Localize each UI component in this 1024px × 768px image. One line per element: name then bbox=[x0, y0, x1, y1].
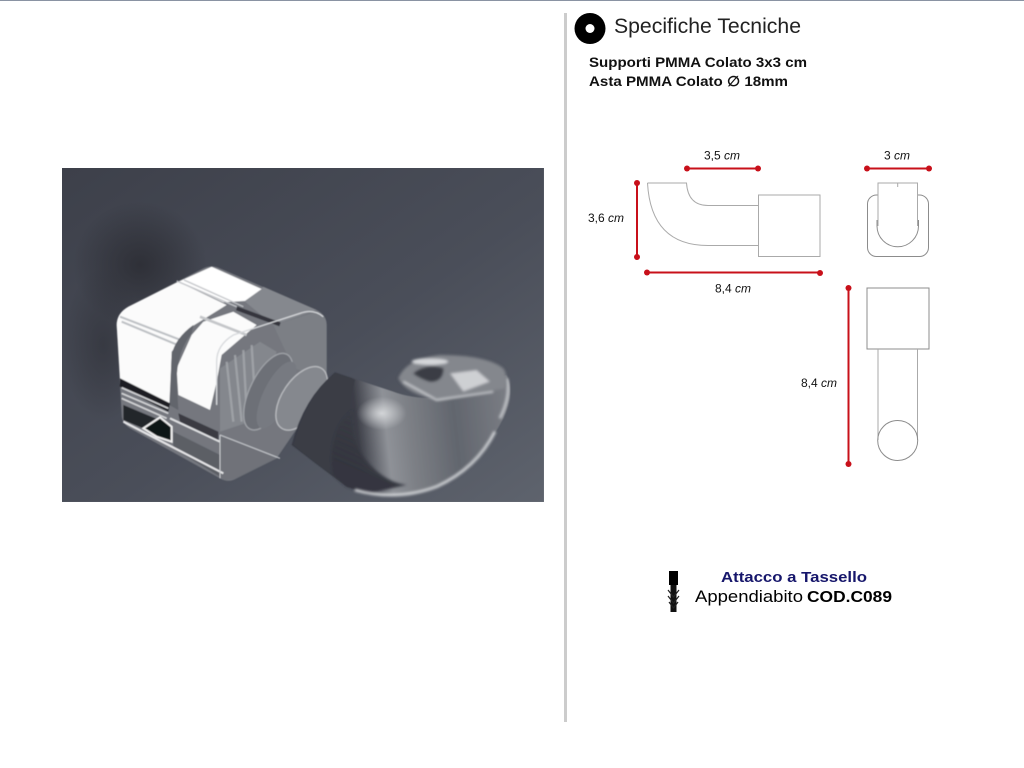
hook tip bbox=[398, 355, 506, 400]
technical drawing: top view bbox=[801, 285, 929, 467]
top border line bbox=[0, 0, 1024, 1]
heading: Specifiche Tecniche: Specifiche Tecniche bbox=[614, 15, 801, 38]
dimension: 3,6 cm bbox=[588, 180, 640, 260]
text block: materials bbox=[589, 54, 807, 89]
cube body bbox=[117, 266, 327, 481]
hook tube bbox=[292, 372, 510, 495]
vertical divider bbox=[564, 13, 567, 722]
callout: fixing and product code: Appendiabito bbox=[695, 587, 803, 606]
dimension: 3,5 cm: 3,5 cm bbox=[704, 148, 740, 162]
icon: wall plug bbox=[668, 571, 679, 612]
collar bbox=[242, 352, 293, 431]
dimension: 8,4 cm vertical bbox=[801, 285, 852, 467]
technical drawing: side view bbox=[588, 148, 823, 296]
photo: transparent acrylic hook bbox=[62, 168, 544, 502]
technical drawing: front view bbox=[864, 148, 932, 256]
dimension: 3,6 cm: 3,6 cm bbox=[588, 211, 624, 225]
icon: section bullet bbox=[574, 13, 606, 44]
white faces bbox=[117, 282, 227, 403]
callout: fixing and product code: COD.C089 bbox=[807, 589, 892, 606]
bottom window bbox=[120, 378, 170, 412]
clear front face bbox=[220, 342, 277, 432]
dimension: 8,4 cm vertical: 8,4 cm bbox=[801, 376, 837, 390]
dimension: 3 cm: 3 cm bbox=[884, 148, 910, 162]
dimension: 8,4 cm horizontal bbox=[644, 270, 823, 296]
text block: materials: Asta PMMA Colato ∅ 18mm bbox=[589, 73, 788, 89]
callout: fixing and product code: Attacco a Tassello bbox=[721, 569, 867, 586]
callout: fixing and product code bbox=[695, 569, 892, 606]
text block: materials: Supporti PMMA Colato 3x3 cm bbox=[589, 54, 807, 70]
dimension: 8,4 cm horizontal: 8,4 cm bbox=[715, 282, 751, 296]
dimension: 3,5 cm bbox=[684, 148, 761, 172]
